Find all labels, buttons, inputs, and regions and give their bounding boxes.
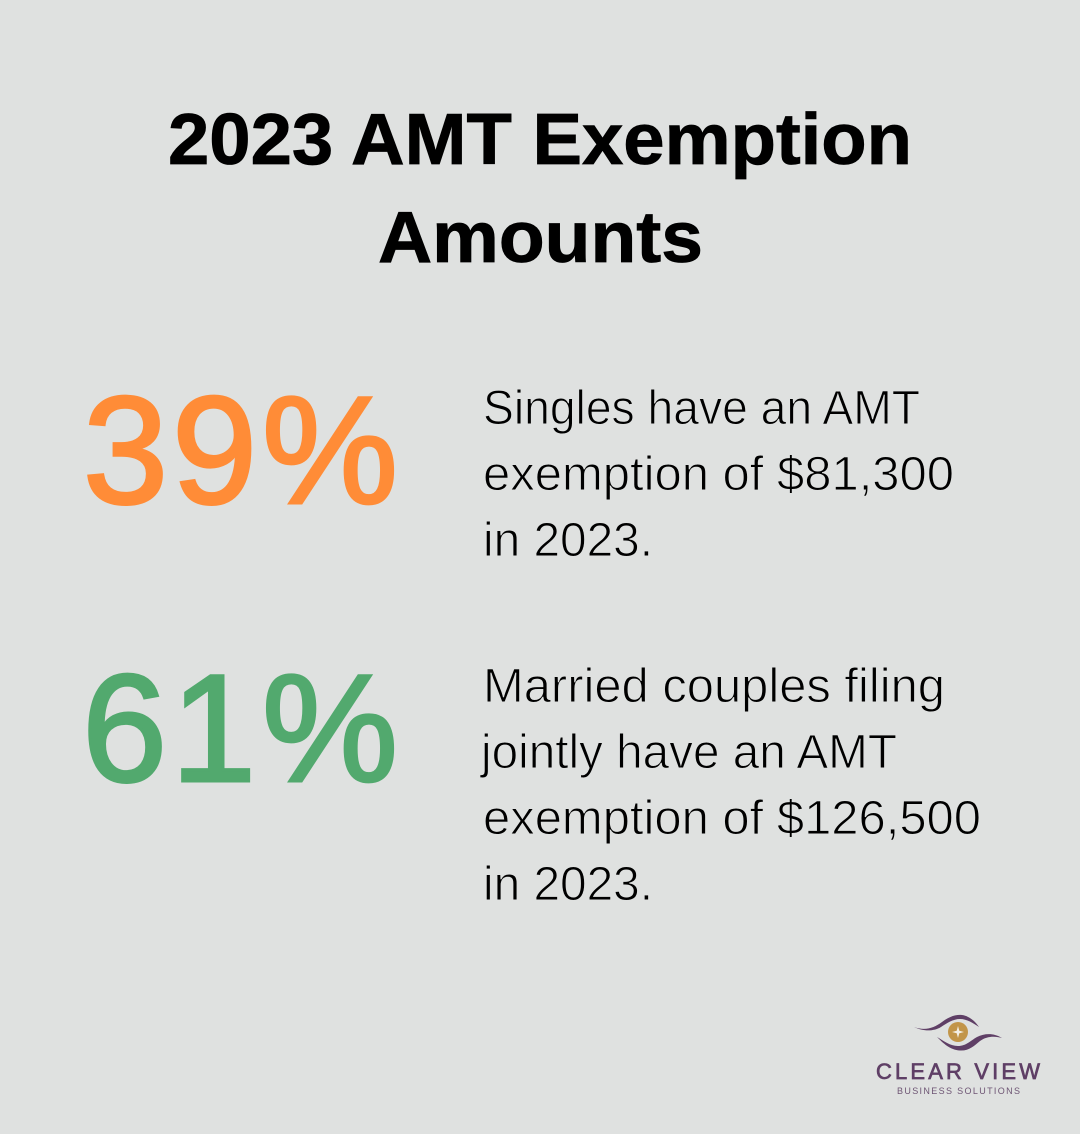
text block: married couples exemption [479,660,981,911]
logo: Clear View Business Solutions [876,1015,1040,1096]
title: Amounts [378,198,703,278]
stat: 61 percent: 61% [82,643,398,814]
text block: married couples exemption: Married couples filing [483,660,945,713]
text block: married couples exemption: exemption of $126,500 [483,792,981,845]
title: 2023 AMT Exemption [168,100,912,180]
stat: 39 percent: 39% [83,365,398,536]
icon: gold circle with star [948,1022,968,1042]
text block: married couples exemption: jointly have an AMT [479,726,897,779]
text block: married couples exemption: in 2023. [483,858,653,911]
icon: eye swooshes [914,1015,1002,1051]
title [168,100,912,278]
text block: singles exemption: in 2023. [483,514,653,567]
logo wordmark: CLEAR VIEW [876,1059,1040,1084]
text block: singles exemption [483,382,954,567]
text block: singles exemption: exemption of $81,300 [483,448,954,501]
text block: singles exemption: Singles have an AMT [483,382,920,435]
logo tagline: BUSINESS SOLUTIONS [897,1086,1020,1096]
